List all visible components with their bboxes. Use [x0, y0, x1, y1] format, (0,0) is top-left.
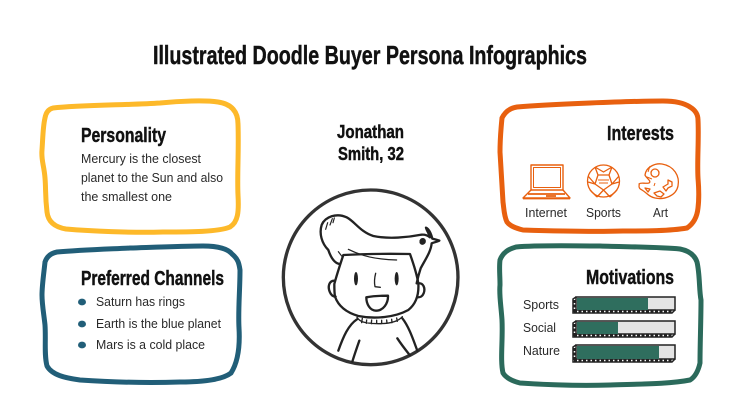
motivations outline — [500, 246, 701, 385]
bar row: sports: Sports — [523, 298, 559, 312]
hair strands — [326, 218, 397, 260]
bar row: nature — [523, 344, 675, 362]
hair — [321, 215, 439, 283]
bullet: Saturn — [78, 299, 86, 305]
channels heading: Preferred Channels — [81, 268, 224, 290]
icon labels — [525, 206, 668, 220]
face — [334, 254, 418, 318]
interests heading: Interests — [607, 123, 674, 145]
panel: preferred channels — [42, 246, 240, 382]
personality body text: planet to the Sun and also — [81, 171, 223, 185]
panel: personality — [42, 101, 238, 232]
ear left — [329, 281, 336, 297]
nose — [375, 273, 380, 287]
icon: soccer ball — [588, 165, 620, 197]
persona name: Jonathan — [337, 121, 404, 142]
personality body text — [81, 152, 223, 204]
persona name — [337, 121, 404, 164]
icon: art palette — [639, 164, 678, 198]
mouth — [366, 296, 388, 311]
sweater — [338, 318, 417, 362]
interests outline — [500, 101, 699, 231]
bullet: Earth — [78, 321, 86, 327]
item: Earth: Earth is the blue planet — [96, 317, 222, 331]
channels list — [78, 295, 222, 352]
motivations heading: Motivations — [586, 267, 674, 289]
portrait ring — [283, 190, 458, 365]
eye left — [354, 272, 358, 285]
persona portrait — [283, 190, 458, 365]
ear right — [418, 283, 424, 297]
collar — [357, 317, 402, 324]
bar row: nature: Nature — [523, 344, 560, 358]
personality body text: the smallest one — [81, 190, 172, 204]
channels outline — [42, 246, 240, 382]
bar row: social: Social — [523, 321, 556, 335]
panel: motivations — [500, 246, 701, 385]
bar row: sports — [523, 297, 675, 313]
icon labels: Art — [653, 206, 668, 220]
bar row: social — [523, 321, 675, 337]
eye right — [395, 272, 399, 285]
title: Illustrated Doodle Buyer Persona Infographics — [153, 40, 587, 70]
hair tie — [421, 239, 425, 244]
panel: interests — [500, 101, 699, 231]
icon labels: Internet — [525, 206, 568, 220]
icon labels: Sports — [586, 206, 621, 220]
icon: laptop — [523, 165, 570, 198]
bullet: Mars — [78, 342, 86, 348]
personality body text: Mercury is the closest — [81, 152, 202, 166]
personality outline — [42, 101, 238, 232]
personality heading: Personality — [81, 125, 167, 147]
item: Mars: Mars is a cold place — [96, 338, 205, 352]
item: Saturn: Saturn has rings — [96, 295, 185, 309]
persona name: Smith, 32 — [338, 143, 404, 164]
